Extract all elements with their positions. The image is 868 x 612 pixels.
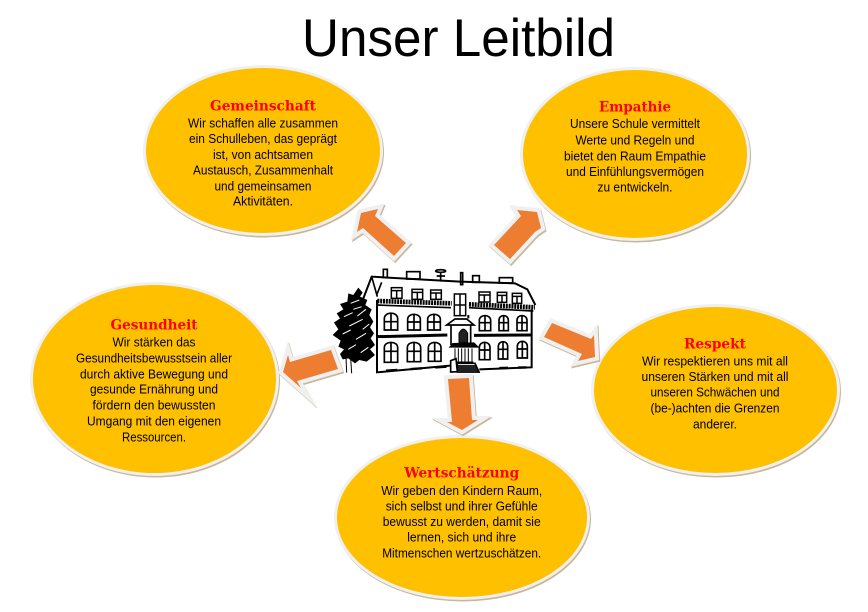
panel: Gesundheit bbox=[30, 282, 280, 478]
ellipse: Gesundheit background bbox=[30, 282, 280, 478]
building: balustrades bbox=[377, 301, 535, 311]
text block: Wertschätzung: Wir geben den Kindern Raum, bbox=[381, 484, 542, 498]
text block: Empathie: Werte und Regeln und bbox=[576, 133, 695, 147]
text block: Respekt: Wir respektieren uns mit all bbox=[642, 355, 788, 369]
text block: Respekt: unseren Schwächen und bbox=[650, 386, 780, 400]
icon: tree bbox=[333, 288, 375, 373]
text block: Gemeinschaft: Aktivitäten. bbox=[233, 195, 293, 209]
building: entrance porch bbox=[447, 319, 479, 372]
arrow: to Gemeinschaft bbox=[357, 209, 407, 258]
text block: Empathie: und Einfühlungsvermögen bbox=[566, 165, 704, 179]
text block: Empathie: bietet den Raum Empathie bbox=[564, 149, 706, 163]
text block: Gesundheit: fördern den bewussten bbox=[92, 399, 216, 413]
text block: Empathie bbox=[564, 117, 706, 195]
text block: Respekt bbox=[642, 355, 788, 432]
heading: Empathie: Empathie bbox=[599, 100, 671, 116]
heading: Gesundheit: Gesundheit bbox=[110, 317, 198, 333]
text block: Gesundheit: durch aktive Bewegung und bbox=[80, 367, 228, 381]
heading: Respekt: Respekt bbox=[684, 337, 747, 353]
text block: Gesundheit bbox=[76, 336, 232, 445]
panel: Respekt bbox=[591, 304, 841, 478]
arrow: to Wertschätzung bbox=[447, 378, 479, 432]
ellipse: Empathie background bbox=[520, 67, 751, 242]
text block: Wertschätzung: sich selbst und ihrer Gefühle bbox=[386, 500, 538, 514]
text block: Gemeinschaft: ist, von achtsamen bbox=[213, 148, 313, 162]
text block: Gemeinschaft: Wir schaffen alle zusammen bbox=[188, 117, 338, 131]
building: roof and chimneys bbox=[363, 269, 535, 305]
text block: Wertschätzung: lernen, sich und ihre bbox=[407, 531, 516, 545]
ellipse: Respekt background bbox=[591, 304, 841, 478]
title: Unser Leitbild bbox=[302, 9, 615, 68]
text block: Respekt: unseren Stärken und mit all bbox=[642, 370, 788, 384]
text block: Gemeinschaft: ein Schulleben, das geprägt bbox=[189, 132, 337, 146]
text block: Wertschätzung: bewusst zu werden, damit sie bbox=[383, 515, 541, 529]
panel: Wertschätzung bbox=[334, 435, 591, 602]
text block: Gemeinschaft bbox=[188, 117, 338, 209]
text block: Respekt: anderer. bbox=[693, 418, 737, 432]
text block: Gesundheit: gesunde Ernährung und bbox=[90, 383, 218, 397]
text block: Gesundheit: Ressourcen. bbox=[122, 431, 186, 445]
heading: Gemeinschaft: Gemeinschaft bbox=[210, 99, 317, 115]
illustration: school building bbox=[333, 269, 535, 373]
ellipse: Wertschätzung background bbox=[334, 435, 591, 602]
building: dormers bbox=[391, 288, 522, 316]
panel: Gemeinschaft bbox=[143, 65, 384, 238]
ellipse: Gemeinschaft background bbox=[143, 65, 384, 238]
text block: Gesundheit: Umgang mit den eigenen bbox=[87, 415, 221, 429]
arrow: to Empathie bbox=[494, 210, 542, 260]
panel: Empathie bbox=[520, 67, 751, 242]
text block: Respekt: (be-)achten die Grenzen bbox=[650, 402, 780, 416]
text block: Empathie: Unsere Schule vermittelt bbox=[570, 117, 700, 131]
text block: Empathie: zu entwickeln. bbox=[598, 181, 672, 195]
building: windows bbox=[384, 313, 527, 362]
text block: Wertschätzung bbox=[381, 484, 542, 560]
heading: Wertschätzung: Wertschätzung bbox=[403, 466, 519, 482]
arrow: to Gesundheit bbox=[283, 350, 339, 390]
building: walls bbox=[377, 300, 532, 372]
text block: Gemeinschaft: Austausch, Zusammenhalt bbox=[193, 163, 333, 177]
arrow: to Respekt bbox=[544, 323, 596, 362]
text block: Gesundheit: Wir stärken das bbox=[112, 336, 196, 350]
text block: Wertschätzung: Mitmenschen wertzuschätzen. bbox=[382, 546, 541, 560]
text block: Gesundheit: Gesundheitsbewusstsein aller bbox=[76, 352, 232, 366]
text block: Gemeinschaft: und gemeinsamen bbox=[214, 179, 312, 193]
